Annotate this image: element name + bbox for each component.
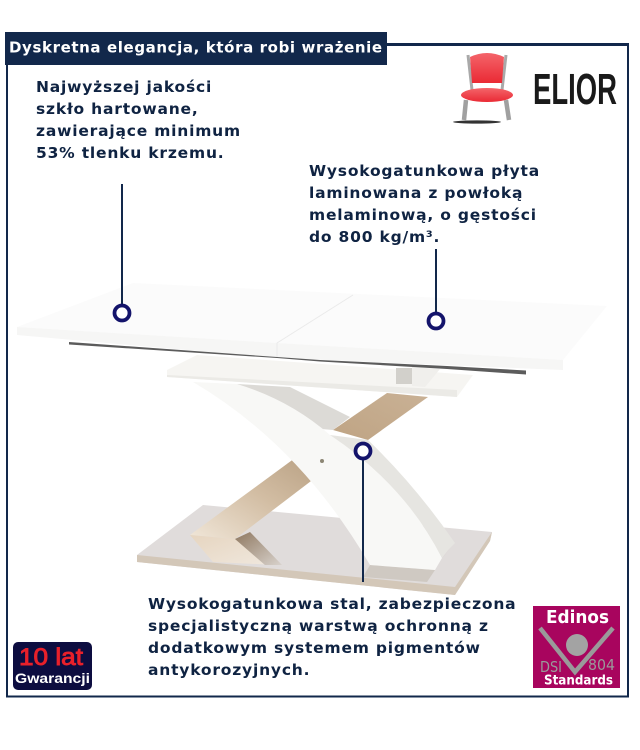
table top [17, 283, 607, 370]
text block: glass: Najwyższej jakości [36, 78, 212, 96]
text block: board: Wysokogatunkowa płyta [309, 162, 540, 180]
icon: chair [453, 53, 513, 124]
table illustration [17, 283, 607, 595]
text block: board: laminowana z powłoką [309, 184, 523, 202]
badge: Edinos standards [533, 606, 620, 688]
text block: glass: zawierające minimum [36, 122, 241, 140]
text block: steel [148, 595, 516, 679]
steel leg [190, 393, 428, 565]
callout: steel [356, 444, 370, 582]
text block: board [309, 162, 540, 246]
table pedestal [167, 355, 473, 397]
heading: Dyskretna elegancja, która robi wrażenie [9, 38, 383, 56]
badge: Edinos standards: DSI [540, 658, 562, 676]
white leg front [193, 382, 455, 582]
badge: Edinos standards: 804 [588, 656, 615, 674]
metal strip [69, 342, 526, 374]
callout: glass [114, 184, 130, 320]
text block: steel: antykorozyjnych. [148, 661, 310, 679]
heading [5, 32, 387, 65]
badge: 10 lat warranty: Gwarancji [15, 670, 90, 686]
text block: steel: Wysokogatunkowa stal, zabezpieczona [148, 595, 516, 613]
text block: board: melaminową, o gęstości [309, 206, 537, 224]
white leg back [237, 384, 350, 430]
text block: steel: dodatkowym systemem pigmentów [148, 639, 481, 657]
text block: steel: specjalistyczną warstwą ochronną z [148, 617, 489, 635]
callout: board [428, 249, 444, 328]
badge: Edinos standards: Edinos [546, 607, 609, 628]
badge: 10 lat warranty [13, 642, 92, 690]
text block: glass: szkło hartowane, [36, 100, 199, 118]
base plate [137, 505, 492, 595]
badge: 10 lat warranty: 10 lat [19, 644, 83, 671]
text block: board: do 800 kg/m³. [309, 228, 440, 246]
badge: Edinos standards: Standards [544, 674, 613, 688]
text block: glass: 53% tlenku krzemu. [36, 144, 224, 162]
text block: glass [36, 78, 241, 162]
